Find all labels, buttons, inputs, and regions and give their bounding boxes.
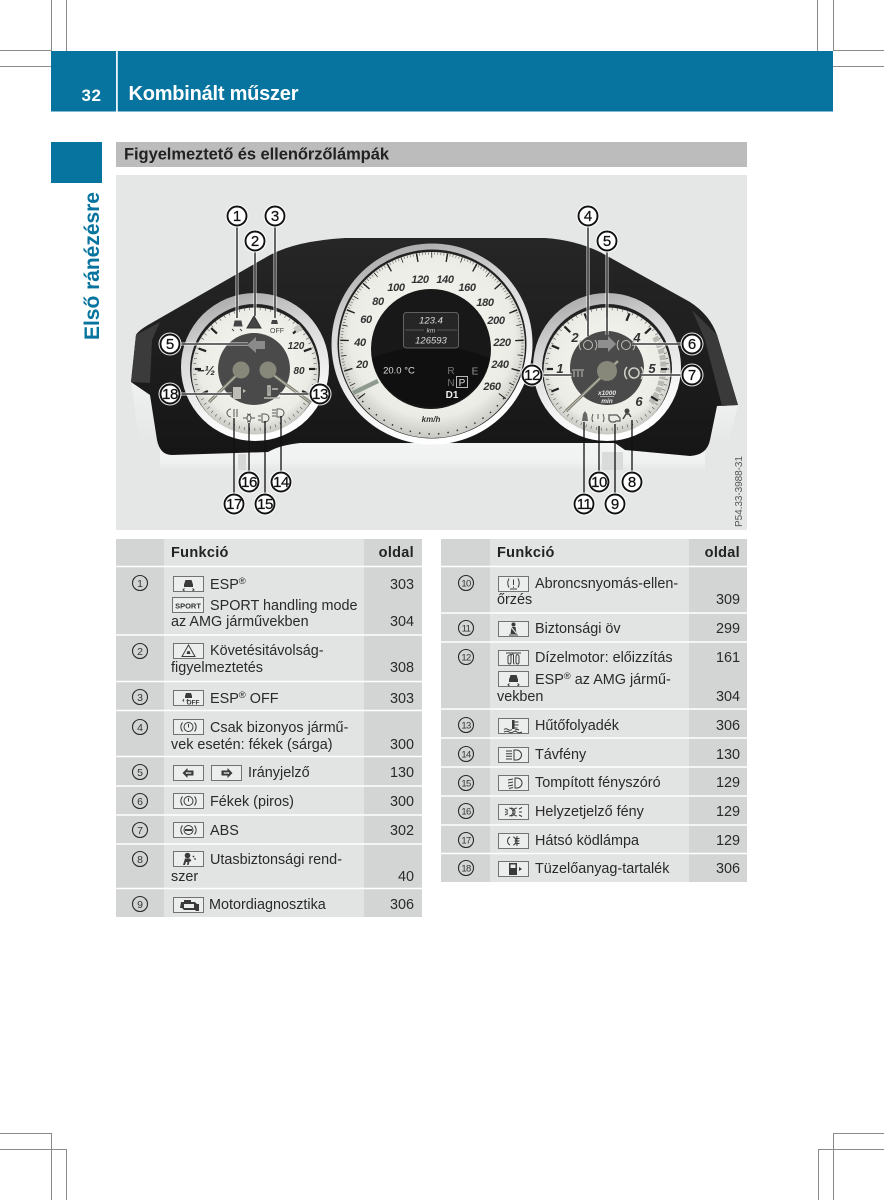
row 4: 300 xyxy=(390,737,414,753)
callout 12 xyxy=(520,364,572,386)
row 3 xyxy=(132,690,414,707)
callout 16 xyxy=(238,423,260,494)
row 12: vekben xyxy=(497,689,543,705)
row 10: Abroncsnyomás-ellen- xyxy=(535,576,678,592)
row 5: Irányjelző xyxy=(248,765,310,781)
row 17: 129 xyxy=(716,833,740,849)
row 3: 3 xyxy=(137,692,143,704)
row 16: Helyzetjelző fény xyxy=(535,804,645,820)
row 8: 40 xyxy=(398,869,414,885)
row 6: 6 xyxy=(137,796,143,808)
side tab xyxy=(51,142,104,340)
speed scale numbers: 260 xyxy=(482,381,502,393)
left gauge: −½ xyxy=(197,363,215,378)
unit label: km/h xyxy=(422,415,440,424)
row 14 xyxy=(458,746,740,763)
row 13: 13 xyxy=(461,720,471,732)
speed scale numbers: 100 xyxy=(387,282,406,294)
callout 5 right: 5 xyxy=(603,233,611,250)
speedometer needle xyxy=(353,381,378,393)
speed scale numbers: 200 xyxy=(486,315,506,327)
centre display xyxy=(371,289,491,409)
callout 13 xyxy=(280,382,332,406)
speed scale numbers: 120 xyxy=(411,274,430,286)
row 3: 303 xyxy=(390,691,414,707)
centre display: D1 xyxy=(446,390,459,401)
row 6: Fékek (piros) xyxy=(210,794,294,810)
row 1: SPORT xyxy=(175,602,201,610)
left gauge xyxy=(181,293,329,441)
callout 18: 18 xyxy=(162,386,178,403)
callout 5 right xyxy=(596,230,618,335)
row 6 xyxy=(132,794,414,810)
row 9: 306 xyxy=(390,897,414,913)
right gauge lamps: x1000 xyxy=(597,390,616,397)
right gauge: 4 xyxy=(632,330,641,345)
row 9: Motordiagnosztika xyxy=(209,897,326,913)
speed scale numbers: 240 xyxy=(490,359,510,371)
page number: 32 xyxy=(82,86,101,105)
row 7: 302 xyxy=(390,823,414,839)
callout 15: 15 xyxy=(257,496,273,513)
row 13 xyxy=(458,718,740,734)
callout 5 left: 5 xyxy=(166,336,174,353)
row 2: figyelmeztetés xyxy=(171,660,263,676)
callout 12: 12 xyxy=(524,367,540,384)
callout 8 xyxy=(620,420,644,494)
row 1 xyxy=(132,576,414,630)
callout 11: 11 xyxy=(577,496,591,513)
row 11: 11 xyxy=(462,624,471,634)
row 12: 161 xyxy=(716,650,740,666)
row 12: Dízelmotor: előizzítás xyxy=(535,650,673,666)
left table xyxy=(116,539,422,917)
right gauge: 2 xyxy=(570,330,579,345)
row 15 xyxy=(458,775,740,791)
callout 2: 2 xyxy=(251,233,259,250)
right gauge lamps xyxy=(572,336,643,422)
callout 8: 8 xyxy=(628,474,636,491)
callout 11 xyxy=(572,422,596,516)
centre display: 126593 xyxy=(415,336,448,346)
callout 15 xyxy=(254,421,276,516)
left table header: oldal xyxy=(379,545,414,561)
callout 18 xyxy=(158,382,232,406)
row 4 xyxy=(132,720,414,753)
side tab label: Első ránézésre xyxy=(81,192,104,340)
callout 9: 9 xyxy=(611,496,619,513)
speed scale numbers: 160 xyxy=(458,282,477,294)
header band xyxy=(51,51,833,112)
right gauge: 5 xyxy=(648,361,656,376)
row 12: ESP xyxy=(535,672,564,688)
row 1: 303 xyxy=(390,577,414,593)
row 16 xyxy=(458,804,740,820)
centre display: km xyxy=(427,328,436,334)
section heading xyxy=(116,142,747,167)
callout 10: 10 xyxy=(591,474,607,491)
callout 3: 3 xyxy=(271,208,279,225)
row 14: 14 xyxy=(461,750,471,760)
speed scale numbers: 80 xyxy=(372,296,385,308)
speed scale numbers: 40 xyxy=(353,337,367,349)
row 11 xyxy=(458,620,740,637)
left table header xyxy=(171,545,414,561)
callout 17 xyxy=(222,418,246,516)
row 15: 15 xyxy=(461,778,471,790)
cluster housing xyxy=(131,238,738,456)
row 1: az AMG járművekben xyxy=(171,614,309,630)
centre display: 20.0 °C xyxy=(383,366,415,376)
row 10: 309 xyxy=(716,592,740,608)
callout 6: 6 xyxy=(688,336,696,353)
row 5: 130 xyxy=(390,765,414,781)
left gauge: 80 xyxy=(293,366,305,377)
row 2 xyxy=(132,643,414,676)
row 15: Tompított fényszóró xyxy=(535,775,661,791)
speed scale numbers xyxy=(353,274,512,393)
row 11: 299 xyxy=(716,621,740,637)
right table backgrounds xyxy=(441,539,747,882)
centre display: P xyxy=(459,378,466,389)
callout 9 xyxy=(604,424,626,516)
callout 7: 7 xyxy=(688,367,696,384)
centre display: R xyxy=(447,366,455,377)
centre display: E xyxy=(472,366,479,378)
row 12: az AMG jármű- xyxy=(571,672,671,688)
row 2: 308 xyxy=(390,660,414,676)
speed scale numbers: 140 xyxy=(436,274,455,286)
right gauge: 6 xyxy=(635,394,643,409)
row 18 xyxy=(458,860,740,877)
callout 3 xyxy=(264,204,286,318)
callout 14 xyxy=(270,416,292,494)
row 13: Hűtőfolyadék xyxy=(535,718,620,734)
right gauge lamps: min xyxy=(601,398,613,405)
centre display: N xyxy=(447,378,455,389)
right table header: Funkció xyxy=(497,545,555,561)
row 12: 12 xyxy=(461,652,471,664)
left table backgrounds xyxy=(116,539,422,917)
row 13: 306 xyxy=(716,718,740,734)
row 12 xyxy=(458,650,740,705)
row 7: 7 xyxy=(137,825,143,837)
callout 4 xyxy=(576,204,600,336)
right table header xyxy=(497,545,740,561)
left gauge lamps xyxy=(227,316,284,422)
row 18: 306 xyxy=(716,861,740,877)
part number: P54.33-3988-31 xyxy=(734,456,745,527)
row 4: 4 xyxy=(137,722,143,734)
row 18: 18 xyxy=(461,864,471,874)
row 9 xyxy=(132,896,414,913)
tachometer needle xyxy=(566,361,618,411)
row 5 xyxy=(132,764,414,781)
row 12: ® xyxy=(564,671,571,682)
row 17 xyxy=(458,832,740,849)
callout 1: 1 xyxy=(233,208,241,225)
row 4: vek esetén: fékek (sárga) xyxy=(171,737,333,753)
cluster shadow band xyxy=(131,382,738,471)
speed scale numbers: 180 xyxy=(476,297,495,309)
callout 5 left xyxy=(158,332,248,356)
left gauge needles xyxy=(209,362,311,403)
callout 2 xyxy=(244,230,266,316)
row 14: 130 xyxy=(716,747,740,763)
left gauge lamps: OFF xyxy=(270,328,284,335)
instrument cluster illustration xyxy=(116,175,747,530)
row 10: őrzés xyxy=(497,592,532,608)
row 1: 1 xyxy=(137,578,143,590)
right table header: oldal xyxy=(705,545,740,561)
row 3: ® xyxy=(239,690,246,701)
speed scale numbers: 60 xyxy=(360,314,373,326)
speed scale numbers: 220 xyxy=(492,337,512,349)
row 17: Hátsó ködlámpa xyxy=(535,833,639,849)
row 3: ESP xyxy=(210,691,239,707)
callout 6 xyxy=(632,332,704,356)
right table xyxy=(441,539,747,882)
centre display: 123.4 xyxy=(419,316,443,326)
callout 10 xyxy=(588,426,610,494)
right gauge xyxy=(533,293,681,441)
callout 4: 4 xyxy=(584,208,592,225)
row 10: 10 xyxy=(461,578,471,590)
row 1: SPORT handling mode xyxy=(210,598,357,614)
row 8 xyxy=(132,852,414,885)
row 1: ® xyxy=(239,576,246,587)
row 7: ABS xyxy=(210,823,239,839)
speed scale numbers: 20 xyxy=(355,359,369,371)
callout 13: 13 xyxy=(312,386,328,403)
row 8: Utasbiztonsági rend- xyxy=(210,852,342,868)
row 7 xyxy=(132,822,414,839)
row 16: 16 xyxy=(461,806,471,818)
row 14: Távfény xyxy=(535,747,587,763)
callout 14: 14 xyxy=(273,474,289,491)
callout 17: 17 xyxy=(226,496,242,513)
row 8: 8 xyxy=(137,854,143,866)
row 18: Tüzelőanyag-tartalék xyxy=(535,861,670,877)
callout 1 xyxy=(226,204,248,318)
row 10 xyxy=(458,576,740,608)
row 2: Követésitávolság- xyxy=(210,643,324,659)
chapter title: Kombinált műszer xyxy=(128,83,299,105)
row 6: 300 xyxy=(390,794,414,810)
row 5: 5 xyxy=(137,767,143,779)
section heading: Figyelmeztető és ellenőrzőlámpák xyxy=(124,146,390,164)
row 8: szer xyxy=(171,869,198,885)
row 3: OFF xyxy=(246,691,279,707)
row 12: 304 xyxy=(716,689,740,705)
row 2: 2 xyxy=(137,646,143,658)
speedometer xyxy=(332,244,532,444)
callout 7 xyxy=(641,364,704,386)
row 17: 17 xyxy=(461,836,471,846)
left table header: Funkció xyxy=(171,545,229,561)
row 1: ESP xyxy=(210,577,239,593)
right gauge: 1 xyxy=(556,361,564,376)
row 15: 129 xyxy=(716,775,740,791)
row 9: 9 xyxy=(137,899,143,911)
callout 16: 16 xyxy=(241,474,257,491)
left gauge: 120 xyxy=(288,341,305,352)
row 4: Csak bizonyos jármű- xyxy=(210,720,349,736)
row 1: 304 xyxy=(390,614,414,630)
row 11: Biztonsági öv xyxy=(535,621,621,637)
row 16: 129 xyxy=(716,804,740,820)
